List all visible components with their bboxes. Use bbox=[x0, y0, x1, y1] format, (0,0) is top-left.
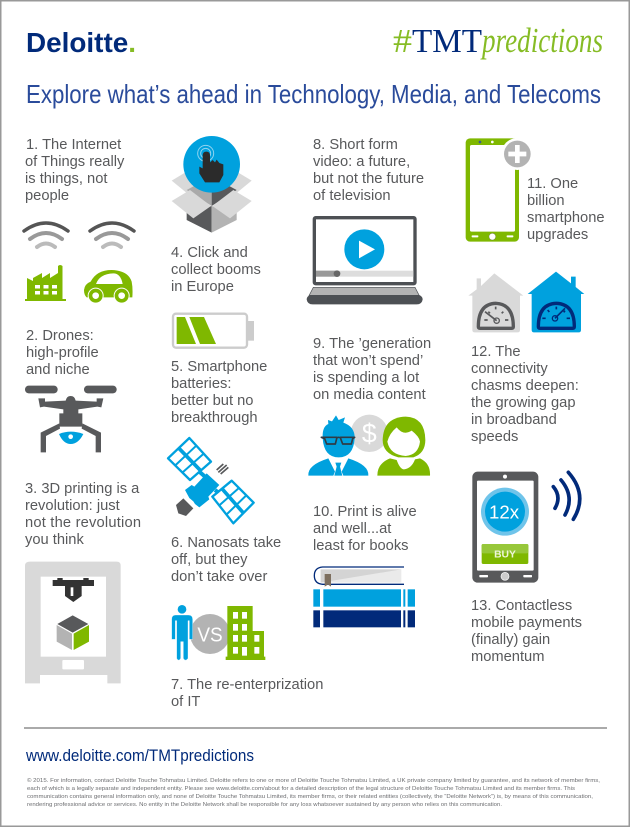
prediction 3 text: not the revolution bbox=[25, 515, 141, 531]
prediction 7 text: 7. The re-enterprization bbox=[171, 677, 323, 693]
icon: wifi signal right bbox=[90, 223, 134, 247]
legal disclaimer: communication contains general information only, and none of Deloitte Touche Tohmatsu Limited, its member firms, or their related entities (collectively, the “Deloitte Network”) is, by means of this communication, bbox=[27, 794, 593, 800]
icon: person versus enterprise building: VS bbox=[197, 624, 223, 646]
prediction 5 text: better but no bbox=[171, 393, 253, 409]
prediction 10 text: and well...at bbox=[313, 521, 391, 537]
prediction 6 text: off, but they bbox=[171, 552, 248, 568]
prediction 8 text: 8. Short form bbox=[313, 137, 398, 153]
icon: consumers and dollar bbox=[308, 415, 430, 476]
prediction 4 text: in Europe bbox=[171, 279, 234, 295]
icon: contactless payment phone: BUY bbox=[494, 550, 516, 561]
icon: connected car bbox=[84, 270, 133, 304]
prediction 12 text: the growing gap bbox=[471, 395, 576, 411]
prediction 12 text: speeds bbox=[471, 429, 518, 445]
prediction 13 text: mobile payments bbox=[471, 615, 582, 631]
prediction 3 text: revolution: just bbox=[25, 498, 120, 514]
prediction 9 text: 9. The ’generation bbox=[313, 336, 431, 352]
prediction 2 text: 2. Drones: bbox=[26, 328, 94, 344]
icon: 3D printer bbox=[25, 562, 121, 683]
prediction 3 text: you think bbox=[25, 532, 84, 548]
icon: click and collect box bbox=[172, 136, 252, 233]
prediction 13 text: (finally) gain bbox=[471, 632, 550, 648]
prediction 8 text: video: a future, bbox=[313, 154, 410, 170]
prediction 11 text: 11. One bbox=[527, 176, 578, 192]
icon: battery bbox=[173, 314, 254, 348]
hashtag TMTpredictions bbox=[393, 21, 603, 60]
prediction 6 text: don’t take over bbox=[171, 569, 267, 585]
prediction 6 text: 6. Nanosats take bbox=[171, 535, 281, 551]
icon: nanosatellite bbox=[168, 438, 254, 523]
icon: contactless payment phone: 12x bbox=[489, 501, 520, 522]
prediction 9 text: is spending a lot bbox=[313, 370, 419, 386]
icon: stack of books bbox=[313, 567, 415, 627]
prediction 5 text: batteries: bbox=[171, 376, 231, 392]
prediction 11 text: smartphone bbox=[527, 210, 605, 226]
prediction 4 text: collect booms bbox=[171, 262, 261, 278]
prediction 3 text: 3. 3D printing is a bbox=[25, 481, 140, 497]
icon: person versus enterprise building bbox=[172, 605, 265, 660]
icon: slow broadband house bbox=[468, 273, 523, 332]
prediction 7 text: of IT bbox=[171, 694, 200, 710]
prediction 12 text: 12. The bbox=[471, 344, 521, 360]
icon: wifi signal left bbox=[24, 223, 68, 247]
prediction 2 text: high-profile bbox=[26, 345, 99, 361]
prediction 8 text: but not the future bbox=[313, 171, 424, 187]
prediction 11 text: billion bbox=[527, 193, 565, 209]
icon: drone bbox=[25, 386, 117, 452]
legal disclaimer: each of which is a legally separate and independent entity. Please see www.deloitte.com/about for a detailed description of the legal structure of Deloitte Touche Tohmatsu Limited and its member firms. This bbox=[27, 786, 575, 792]
icon: laptop with video player bbox=[307, 218, 423, 304]
icon: consumers and dollar: $ bbox=[362, 419, 377, 449]
hashtag TMTpredictions: # bbox=[393, 23, 412, 60]
prediction 12 text: chasms deepen: bbox=[471, 378, 579, 394]
prediction 8 text: of television bbox=[313, 188, 391, 204]
prediction 11 text: upgrades bbox=[527, 227, 588, 243]
prediction 1 text: 1. The Internet bbox=[26, 137, 121, 153]
hashtag TMTpredictions: TMT bbox=[412, 23, 482, 60]
icon: smartphone upgrade bbox=[466, 138, 533, 242]
legal disclaimer: rendering professional advice or services. No entity in the Deloitte Network shall be responsible for any loss whatsoever sustained by any person who relies on this communication. bbox=[27, 802, 502, 808]
prediction 12 text: in broadband bbox=[471, 412, 557, 428]
prediction 5 text: 5. Smartphone bbox=[171, 359, 267, 375]
prediction 5 text: breakthrough bbox=[171, 410, 258, 426]
prediction 10 text: least for books bbox=[313, 538, 409, 554]
prediction 13 text: momentum bbox=[471, 649, 544, 665]
legal disclaimer: © 2015. For information, contact Deloitte Touche Tohmatsu Limited. Deloitte refers to one or more of Deloitte Touche Tohmatsu Limited, a UK private company limited by guarantee, and its network of member firms, bbox=[27, 777, 600, 784]
website link: www.deloitte.com/TMTpredictions bbox=[25, 746, 254, 765]
prediction 9 text: on media content bbox=[313, 387, 426, 403]
icon: factory bbox=[25, 265, 66, 301]
icon: fast broadband house bbox=[528, 272, 584, 332]
prediction 12 text: connectivity bbox=[471, 361, 548, 377]
prediction 2 text: and niche bbox=[26, 362, 90, 378]
prediction 13 text: 13. Contactless bbox=[471, 598, 572, 614]
prediction 10 text: 10. Print is alive bbox=[313, 504, 417, 520]
Deloitte logo: Deloitte. bbox=[26, 27, 136, 58]
prediction 9 text: that won’t spend’ bbox=[313, 353, 423, 369]
prediction 1 text: is things, not bbox=[25, 171, 107, 187]
legal disclaimer bbox=[27, 777, 600, 808]
icon: contactless payment phone bbox=[472, 472, 580, 583]
prediction 1 text: of Things really bbox=[25, 154, 125, 170]
prediction 1 text: people bbox=[25, 188, 69, 204]
prediction 4 text: 4. Click and bbox=[171, 245, 248, 261]
